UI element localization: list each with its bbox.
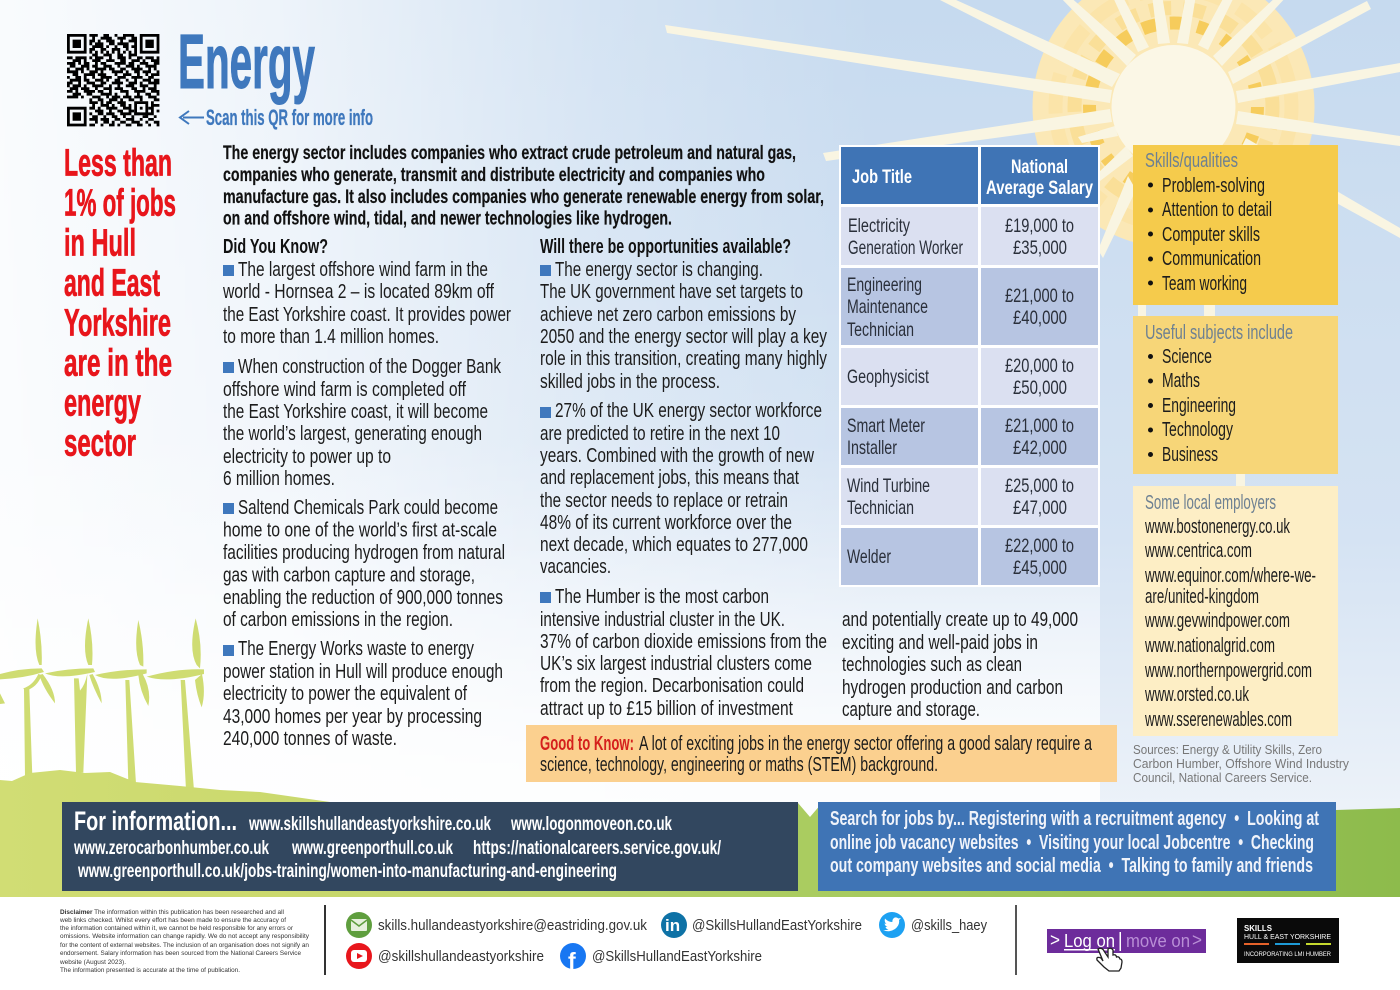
panel: useful subjects: Business <box>1162 444 1218 466</box>
column: did you know: the East Yorkshire coast. It provides power <box>223 304 511 326</box>
panel: skills and qualities <box>1133 145 1338 305</box>
sun <box>665 0 1400 488</box>
column continuation <box>842 609 1078 721</box>
heading: opportunities: Will there be opportunities available? <box>540 236 791 258</box>
row: electricity generation worker: Generation Worker <box>848 237 963 259</box>
column: did you know: offshore wind farm is completed off <box>223 379 466 401</box>
panel: skills and qualities: Team working <box>1162 273 1247 295</box>
column: opportunities: and replacement jobs, this means that <box>540 467 799 489</box>
row: engineering maintenance technician: £40,000 <box>1013 307 1067 329</box>
disclaimer: website (August 2023). <box>59 959 126 966</box>
row: geophysicist: £20,000 to <box>1005 355 1074 377</box>
table header: Average Salary <box>986 177 1093 199</box>
column: did you know: Saltend Chemicals Park could become <box>238 497 498 519</box>
panel: useful subjects: Technology <box>1162 419 1233 441</box>
column: did you know: the East Yorkshire coast, it will become <box>223 401 488 423</box>
QR caption with arrow <box>180 105 373 130</box>
row: engineering maintenance technician: Engineering <box>847 274 922 296</box>
panel: useful subjects: Useful subjects include <box>1145 322 1293 344</box>
callout: good to know: A lot of exciting jobs in the energy sector offering a good salary require a <box>639 733 1093 755</box>
column: opportunities: achieve net zero carbon emissions by <box>540 304 796 326</box>
disclaimer <box>59 909 310 974</box>
column: did you know: The Energy Works waste to energy <box>238 638 474 660</box>
column: did you know: facilities producing hydrogen from natural <box>223 542 505 564</box>
column: opportunities <box>540 236 827 720</box>
column: did you know: electricity to power the equivalent of <box>223 683 467 705</box>
column: did you know <box>222 236 511 750</box>
log on move on logo: move on <box>1126 931 1190 951</box>
table header: Job Title <box>852 166 912 188</box>
panel: for information: www.greenporthull.co.uk/jobs-training/women-into-manufacturing-and-engineering <box>77 861 617 882</box>
row: engineering maintenance technician: Maintenance <box>847 296 928 318</box>
column continuation: and potentially create up to 49,000 <box>842 609 1078 631</box>
column: did you know: to more than 1.4 million homes. <box>223 326 439 348</box>
contact: twitter <box>879 912 987 938</box>
row: smart meter installer: £42,000 <box>1013 437 1067 459</box>
row: welder: £45,000 <box>1013 557 1067 579</box>
sun rays <box>665 0 1400 488</box>
panel: local employers <box>1133 486 1338 736</box>
panel: for information: For information... <box>74 806 237 836</box>
contact: twitter: @skills_haey <box>911 917 987 934</box>
column: opportunities: 27% of the UK energy sector workforce <box>555 400 822 422</box>
sources note <box>1133 742 1349 785</box>
column: opportunities: The UK government have set targets to <box>540 281 803 303</box>
wind turbines <box>0 618 204 790</box>
callout: good to know: Good to Know: <box>540 733 634 755</box>
panel: for information: www.skillshullandeastyorkshire.co.uk <box>248 814 491 835</box>
footer background <box>0 897 1400 990</box>
contact: email <box>346 912 647 938</box>
panel: for information: https://nationalcareers.service.gov.uk/ <box>473 838 722 859</box>
row: wind turbine technician <box>841 468 1098 525</box>
skills hull and east yorkshire logo: HULL & EAST YORKSHIRE <box>1244 932 1331 941</box>
turbine 1 <box>0 618 55 777</box>
panel: skills and qualities: Computer skills <box>1162 224 1260 246</box>
panel: useful subjects: Engineering <box>1162 395 1236 417</box>
panel: local employers: www.northernpowergrid.com <box>1144 660 1312 682</box>
column: did you know: 240,000 tonnes of waste. <box>223 728 397 750</box>
callout: good to know <box>526 725 1117 782</box>
sources note: Carbon Humber, Offshore Wind Industry <box>1133 756 1349 771</box>
panel: useful subjects: Science <box>1162 346 1212 368</box>
column: did you know: enabling the reduction of 900,000 tonnes <box>223 587 503 609</box>
intro paragraph <box>223 143 824 230</box>
disclaimer: The information presented is accurate at the time of publication. <box>60 967 240 974</box>
column: opportunities: are predicted to retire in the next 10 <box>540 423 780 445</box>
column: opportunities: the sector needs to replace or retrain <box>540 490 788 512</box>
title: Energy <box>178 19 315 105</box>
column: opportunities: from the region. Decarbonisation could <box>540 675 804 697</box>
contact: email: skills.hullandeastyorkshire@eastriding.gov.uk <box>378 917 647 934</box>
column: did you know: world - Hornsea 2 – is located 89km off <box>222 281 494 303</box>
column continuation: exciting and well-paid jobs in <box>842 632 1038 654</box>
sources note: Sources: Energy & Utility Skills, Zero <box>1133 742 1322 757</box>
row: geophysicist: Geophysicist <box>847 366 929 388</box>
panel: skills and qualities: Problem-solving <box>1162 175 1265 197</box>
column: opportunities: vacancies. <box>540 556 611 578</box>
panel: for information: www.greenporthull.co.uk <box>291 838 453 859</box>
panel: skills and qualities: Communication <box>1162 248 1261 270</box>
disclaimer: web links checked. Whilst every effort has been made to ensure the accuracy of <box>59 917 286 924</box>
column: did you know: of carbon emissions in the region. <box>223 609 453 631</box>
column: did you know: The largest offshore wind farm in the <box>238 259 488 281</box>
skills hull and east yorkshire logo: SKILLS <box>1244 924 1273 933</box>
row: geophysicist: £50,000 <box>1013 377 1067 399</box>
skills hull and east yorkshire logo: INCORPORATING LMI HUMBER <box>1244 952 1332 958</box>
contact: linkedin: in <box>665 916 680 935</box>
contact: facebook <box>560 943 762 974</box>
column: opportunities: years. Combined with the growth of new <box>540 445 814 467</box>
panel: skills and qualities: Attention to detail <box>1162 199 1272 221</box>
row: electricity generation worker: £35,000 <box>1013 237 1067 259</box>
row: welder: £22,000 to <box>1005 535 1074 557</box>
contact: facebook: f <box>568 948 576 974</box>
callout: good to know: science, technology, engineering or maths (STEM) background. <box>540 754 938 776</box>
row: smart meter installer: £21,000 to <box>1005 415 1074 437</box>
column continuation: capture and storage. <box>842 699 980 721</box>
column: did you know: home to one of the world’s first at-scale <box>223 520 497 542</box>
row: engineering maintenance technician: Technician <box>847 319 914 341</box>
row: wind turbine technician: Technician <box>847 497 914 519</box>
QR caption with arrow: Scan this QR for more info <box>206 105 373 130</box>
panel: for information: www.logonmoveon.co.uk <box>510 814 672 835</box>
panel: local employers: www.nationalgrid.com <box>1144 635 1275 657</box>
turbine 2 <box>45 618 102 773</box>
column continuation: hydrogen production and carbon <box>842 677 1063 699</box>
contact: linkedin: @SkillsHullandEastYorkshire <box>692 917 862 934</box>
panel: local employers: are/united-kingdom <box>1145 586 1259 608</box>
intro paragraph: companies who generate, transmit and distribute electricity and companies who <box>223 165 765 186</box>
column: opportunities: UK’s six largest industrial clusters come <box>540 653 812 675</box>
skills hull and east yorkshire logo <box>1237 918 1339 963</box>
column: opportunities: skilled jobs in the process. <box>540 371 720 393</box>
column: did you know: electricity to power up to <box>223 446 391 468</box>
QR code <box>67 34 159 126</box>
column: did you know: power station in Hull will produce enough <box>223 661 503 683</box>
column: opportunities: role in this transition, creating many highly <box>540 348 827 370</box>
disclaimer: endorsement. Salary information has been sourced from the National Careers Service <box>60 950 301 957</box>
panel: local employers: www.gevwindpower.com <box>1144 610 1290 632</box>
row: wind turbine technician: £25,000 to <box>1005 475 1074 497</box>
column: did you know: 43,000 homes per year by processing <box>223 706 482 728</box>
row: welder: Welder <box>847 546 891 568</box>
red headline statistic: sector <box>64 422 136 464</box>
red headline statistic: are in the <box>64 342 172 384</box>
row: wind turbine technician: £47,000 <box>1013 497 1067 519</box>
contact: youtube: @skillshullandeastyorkshire <box>378 948 544 965</box>
column: opportunities: 2050 and the energy sector will play a key <box>540 326 827 348</box>
heading: did you know: Did You Know? <box>223 236 328 258</box>
disclaimer: omissions. Website information can change rapidly. We do not accept any responsibility <box>60 933 310 940</box>
red headline statistic: in Hull <box>64 222 136 264</box>
log on move on logo: > <box>1050 930 1060 950</box>
row: welder <box>841 528 1098 585</box>
panel: local employers: www.bostonenergy.co.uk <box>1144 516 1291 538</box>
red headline statistic: energy <box>64 382 141 424</box>
row: smart meter installer <box>841 408 1098 465</box>
column: did you know: the world’s largest, generating enough <box>223 423 482 445</box>
intro paragraph: The energy sector includes companies who extract crude petroleum and natural gas, <box>223 143 796 164</box>
column continuation: technologies such as clean <box>842 654 1022 676</box>
column: opportunities: 37% of carbon dioxide emissions from the <box>540 631 827 653</box>
log on move on logo <box>1047 929 1206 971</box>
row: smart meter installer: Installer <box>847 437 897 459</box>
panel: local employers: www.equinor.com/where-we- <box>1144 565 1316 587</box>
column: did you know: 6 million homes. <box>223 468 335 490</box>
turbine 3 <box>95 620 149 783</box>
red headline statistic: Yorkshire <box>64 302 171 344</box>
table header <box>841 147 1098 204</box>
row: electricity generation worker: £19,000 to <box>1005 215 1074 237</box>
turbine 4 <box>147 618 204 790</box>
intro paragraph: manufacture gas. It also includes companies who generate renewable energy from solar, <box>223 187 824 208</box>
row: smart meter installer: Smart Meter <box>847 415 925 437</box>
panel: local employers: Some local employers <box>1145 492 1276 514</box>
row: electricity generation worker: Electricity <box>848 215 910 237</box>
intro paragraph: on and offshore wind, tidal, and newer technologies like hydrogen. <box>223 208 672 230</box>
log on move on logo: Log on <box>1064 931 1115 951</box>
red headline statistic: Less than <box>64 142 172 184</box>
disclaimer: for the content of external websites. The inclusion of an organisation does not signify an <box>60 942 309 949</box>
column: opportunities: 48% of its current workforce over the <box>540 512 792 534</box>
contact: youtube <box>346 943 544 969</box>
log on move on logo: > <box>1192 930 1202 950</box>
panel: useful subjects <box>1133 316 1338 474</box>
panel: skills and qualities: Skills/qualities <box>1145 150 1238 172</box>
panel: local employers: www.centrica.com <box>1144 540 1252 562</box>
red headline statistic: and East <box>64 262 160 304</box>
contact: linkedin <box>661 912 862 938</box>
column: did you know: gas with carbon capture and storage, <box>223 564 475 586</box>
disclaimer: Disclaimer The information within this publication has been researched and all <box>60 909 285 916</box>
panel: search for jobs <box>818 802 1336 891</box>
salary table <box>839 145 1100 587</box>
sources note: Council, National Careers Service. <box>1133 770 1312 785</box>
panel: for information: www.zerocarbonhumber.co.uk <box>73 838 269 859</box>
row: wind turbine technician: Wind Turbine <box>847 475 930 497</box>
ground <box>0 770 1400 898</box>
column: opportunities: attract up to £15 billion of investment <box>540 698 793 720</box>
row: engineering maintenance technician: £21,000 to <box>1005 285 1074 307</box>
table header: National <box>1011 156 1068 178</box>
row: electricity generation worker <box>841 207 1098 265</box>
icon: hand cursor <box>1097 948 1122 971</box>
column: opportunities: intensive industrial cluster in the UK. <box>540 609 785 631</box>
row: engineering maintenance technician <box>841 268 1098 345</box>
panel: useful subjects: Maths <box>1162 370 1200 392</box>
column: opportunities: The Humber is the most carbon <box>555 586 769 608</box>
panel: for information <box>62 802 798 891</box>
contact: facebook: @SkillsHullandEastYorkshire <box>592 948 762 965</box>
column: did you know: When construction of the Dogger Bank <box>238 356 502 378</box>
panel: local employers: www.sserenewables.com <box>1144 709 1292 731</box>
red headline statistic: 1% of jobs <box>64 182 176 224</box>
disclaimer: the information contained within it, we cannot be held responsible for any errors or <box>60 925 294 932</box>
column: opportunities: next decade, which equates to 277,000 <box>540 534 808 556</box>
row: geophysicist <box>841 348 1098 405</box>
panel: local employers: www.orsted.co.uk <box>1144 684 1250 706</box>
red headline statistic <box>64 142 176 464</box>
column: opportunities: The energy sector is changing. <box>555 259 763 281</box>
